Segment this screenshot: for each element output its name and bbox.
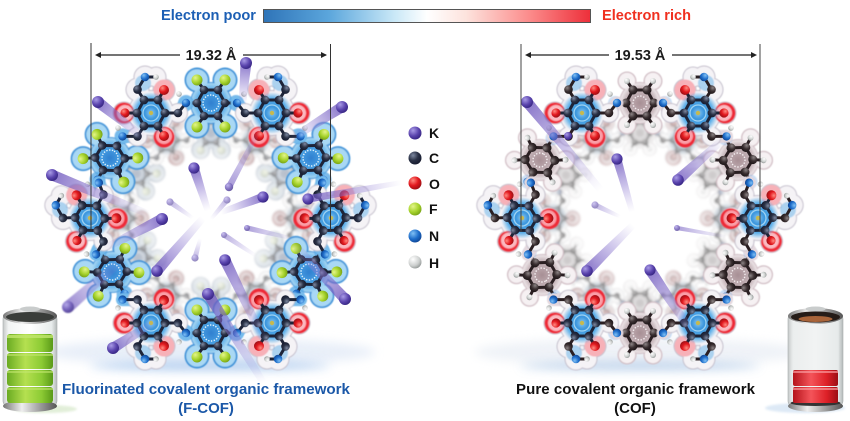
legend: H: H bbox=[429, 255, 439, 271]
ground shadow bbox=[475, 338, 805, 370]
legend: K: K bbox=[429, 125, 439, 141]
title: electron density legend bbox=[161, 7, 691, 24]
fluorinated molecular framework bbox=[30, 66, 391, 370]
label: electron poor: Electron poor bbox=[161, 7, 256, 24]
legend: C: C bbox=[429, 150, 439, 166]
caption: COF: (COF) bbox=[614, 400, 656, 417]
legend: O bbox=[408, 176, 440, 192]
legend: H bbox=[408, 255, 439, 271]
label: electron rich: Electron rich bbox=[602, 7, 691, 24]
colour gradient bar bbox=[264, 10, 590, 22]
legend: N bbox=[408, 228, 439, 244]
dimension: 19.32 angstrom: 19.32 Å bbox=[186, 47, 237, 64]
central void bbox=[141, 148, 281, 288]
panel: F-COF framework bbox=[30, 57, 402, 386]
legend: C bbox=[408, 150, 439, 166]
icon: full green battery bbox=[3, 306, 77, 413]
dimension: 19.53 angstrom: 19.53 Å bbox=[615, 47, 666, 64]
atom legend bbox=[408, 125, 440, 271]
caption: F-COF: Fluorinated covalent organic framework bbox=[62, 381, 351, 398]
ground shadow bbox=[45, 338, 375, 370]
central void bbox=[566, 144, 714, 292]
caption: F-COF bbox=[62, 381, 351, 417]
legend: K bbox=[408, 125, 439, 141]
inner receding framework bbox=[508, 105, 772, 331]
legend: F bbox=[408, 201, 438, 217]
inner receding framework bbox=[77, 105, 344, 331]
caption: COF bbox=[516, 381, 756, 417]
dimension: 19.53 angstrom bbox=[521, 44, 760, 232]
dimension: 19.32 angstrom bbox=[91, 43, 330, 232]
icon: low red battery bbox=[765, 306, 845, 413]
panel: pure COF framework bbox=[462, 66, 818, 370]
caption: F-COF: (F-COF) bbox=[178, 400, 234, 417]
pure molecular framework bbox=[462, 66, 818, 370]
legend: F: F bbox=[429, 201, 438, 217]
potassium ions with motion trails bbox=[46, 57, 402, 386]
legend: O: O bbox=[429, 176, 440, 192]
legend: N: N bbox=[429, 228, 439, 244]
potassium ions with motion trails bbox=[521, 96, 727, 339]
caption: COF: Pure covalent organic framework bbox=[516, 381, 756, 398]
